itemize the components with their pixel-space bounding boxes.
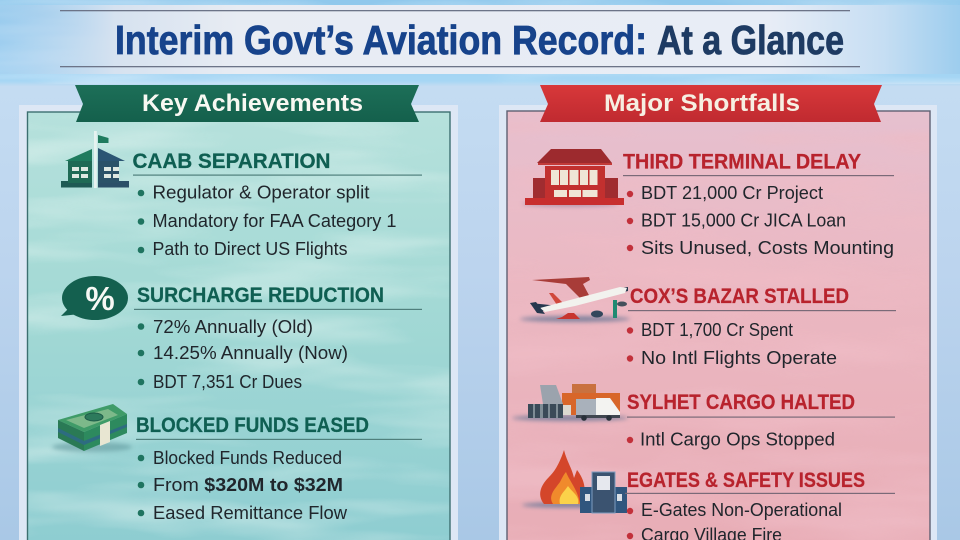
- bullet list: [138, 316, 348, 392]
- bullet list: BDT 15,000 Cr JICA Loan: [641, 210, 846, 230]
- icon: fire and e-gate: [522, 450, 627, 513]
- bullet list: BDT 7,351 Cr Dues: [153, 371, 302, 392]
- section: third terminal delay: [522, 149, 894, 258]
- ribbon: key achievements: [75, 85, 419, 122]
- bullet list: Path to Direct US Flights: [152, 238, 348, 259]
- bullet list: E-Gates Non-Operational: [641, 499, 842, 520]
- title banner: [0, 5, 960, 74]
- heading: SURCHARGE REDUCTION: [137, 284, 384, 307]
- section: eGates and safety issues: [522, 450, 895, 540]
- bullet list: Intl Cargo Ops Stopped: [640, 428, 835, 450]
- icon: cargo truck and containers: [512, 384, 628, 421]
- ribbon: major shortfalls: [540, 85, 882, 122]
- bullet list: [138, 447, 348, 523]
- bullet list: Eased Remittance Flow: [153, 502, 348, 523]
- heading: THIRD TERMINAL DELAY: [623, 150, 861, 174]
- heading: SYLHET CARGO HALTED: [627, 391, 855, 414]
- section: blocked funds eased: [52, 404, 422, 523]
- icon: terminal building: [522, 149, 624, 206]
- heading: COX’S BAZAR STALLED: [630, 285, 849, 308]
- section: CAAB separation: [61, 131, 422, 259]
- icon: percent speech bubble: [61, 276, 128, 320]
- bullet list: [627, 182, 894, 258]
- bullet list: [627, 319, 837, 368]
- panel: key achievements: [19, 85, 458, 540]
- bullet list: Sits Unused, Costs Mounting: [641, 237, 894, 258]
- bullet list: Regulator & Operator split: [152, 182, 370, 202]
- section: surcharge reduction: [61, 276, 422, 392]
- bullet list: No Intl Flights Operate: [641, 347, 837, 368]
- section: Cox's Bazar stalled: [520, 277, 896, 368]
- bullet list: Mandatory for FAA Category 1: [152, 210, 396, 231]
- bullet list: [627, 499, 842, 540]
- icon: parked aircraft: [520, 277, 630, 322]
- bullet list: 72% Annually (Old): [153, 316, 313, 337]
- bullet list: BDT 21,000 Cr Project: [641, 182, 823, 203]
- bullet list: From $320M to $32M: [153, 474, 343, 495]
- bullet list: BDT 1,700 Cr Spent: [641, 319, 793, 340]
- heading: EGATES & SAFETY ISSUES: [627, 469, 865, 492]
- icon: split building with flag: [61, 131, 129, 188]
- ribbon: key achievements: Key Achievements: [142, 90, 363, 117]
- title text: Interim Govt’s Aviation Record:: [115, 17, 647, 63]
- heading: CAAB SEPARATION: [132, 150, 330, 173]
- bullet list: [138, 182, 396, 259]
- bullet list: Blocked Funds Reduced: [153, 447, 342, 468]
- icon: stack of banknotes: [52, 404, 132, 452]
- title text: At a Glance: [657, 17, 844, 63]
- heading: BLOCKED FUNDS EASED: [136, 414, 369, 437]
- bullet list: 14.25% Annually (Now): [153, 342, 348, 363]
- section: Sylhet cargo halted: [512, 384, 895, 450]
- icon: percent speech bubble: %: [85, 280, 115, 317]
- ribbon: major shortfalls: Major Shortfalls: [604, 90, 800, 117]
- panel: major shortfalls: [499, 85, 937, 540]
